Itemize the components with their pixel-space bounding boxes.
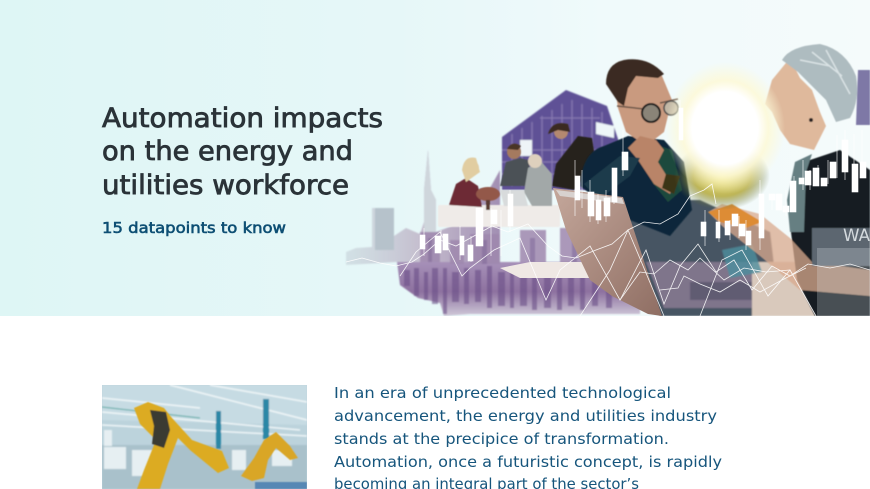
small meeting group bbox=[438, 123, 596, 227]
photo: robotic arms in a factory bbox=[102, 385, 307, 489]
robot arm right bbox=[241, 432, 298, 481]
dark desk area bbox=[610, 200, 830, 316]
hero collage bbox=[346, 44, 870, 316]
candlestick chart bbox=[420, 100, 866, 262]
title: on the energy and bbox=[102, 136, 353, 167]
intro paragraph: In an era of unprecedented technological bbox=[334, 384, 671, 402]
title: Automation impacts bbox=[102, 103, 383, 134]
laptop bbox=[553, 188, 662, 316]
intro paragraph: Automation, once a futuristic concept, is rapidly bbox=[334, 453, 722, 471]
robot arm left bbox=[134, 402, 307, 489]
pale floor panel bbox=[817, 248, 870, 316]
woman bbox=[708, 44, 870, 316]
intro paragraph: stands at the precipice of transformation. bbox=[334, 430, 669, 448]
hero background bbox=[0, 0, 870, 316]
title: utilities workforce bbox=[102, 170, 349, 201]
overlay lettering: WA bbox=[843, 226, 870, 246]
subtitle: 15 datapoints to know bbox=[102, 219, 286, 237]
sunlight glow bbox=[676, 156, 769, 209]
desk and papers bbox=[500, 262, 590, 278]
market lines bbox=[346, 184, 870, 316]
man in suit bbox=[580, 59, 692, 236]
skyline bbox=[346, 90, 640, 316]
intro paragraph: advancement, the energy and utilities industry bbox=[334, 407, 717, 425]
